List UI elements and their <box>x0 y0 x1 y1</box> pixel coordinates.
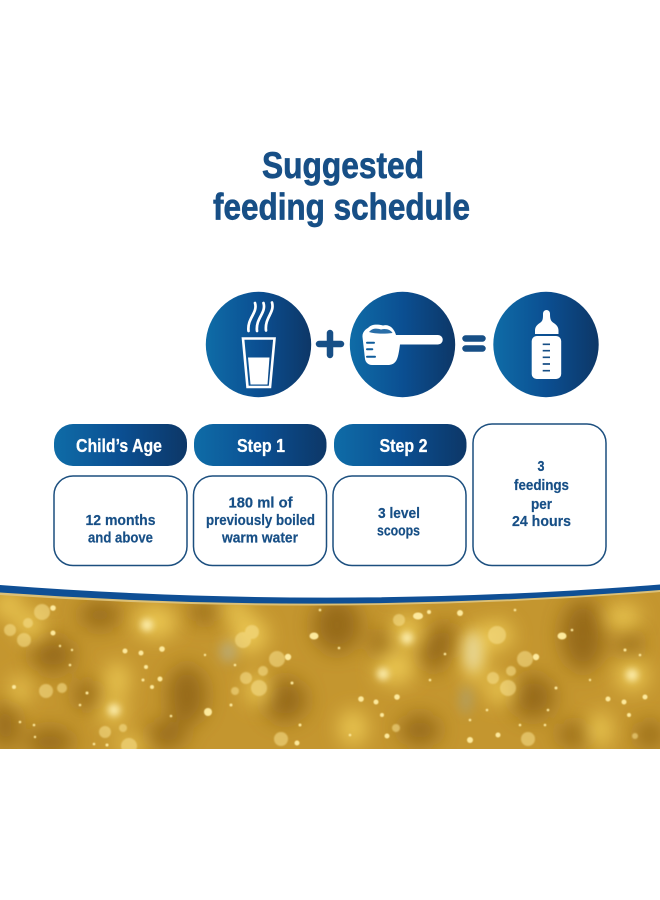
value box <box>54 476 187 566</box>
value box <box>194 476 326 566</box>
gold background <box>0 585 660 756</box>
value box: previously boiled <box>206 513 315 529</box>
value box: warm water <box>221 530 298 546</box>
column: feedings box: 24 hours <box>512 514 571 530</box>
icon: plus <box>319 333 341 355</box>
value box: and above <box>88 530 153 546</box>
column: step 2 <box>333 424 466 566</box>
header pill: Step 2 <box>380 436 428 456</box>
value box: 12 months <box>86 513 156 529</box>
gold edge <box>0 590 660 604</box>
header pill: Step 1 <box>237 436 285 456</box>
icon: measuring scoop <box>350 292 455 397</box>
column: child's age <box>54 424 187 566</box>
icon: equals <box>466 338 482 348</box>
equation icons <box>206 292 599 397</box>
blue curve <box>0 584 660 604</box>
icon: glass of warm water <box>206 292 311 397</box>
header pill <box>194 424 326 466</box>
title: feeding schedule <box>213 186 470 228</box>
column: feedings box: 3 <box>538 459 544 475</box>
value box: 3 level <box>378 506 420 522</box>
header pill <box>334 424 466 466</box>
header pill <box>54 424 187 466</box>
title: Suggested <box>262 145 424 186</box>
column: feedings box <box>473 424 606 566</box>
column: feedings box: per <box>531 497 552 513</box>
gold bokeh band with blue curve <box>0 584 660 756</box>
value box: scoops <box>377 524 420 540</box>
icon: baby bottle <box>493 292 599 397</box>
column: step 1 <box>194 424 326 566</box>
value box <box>333 476 466 566</box>
title <box>213 145 470 228</box>
column: feedings box: feedings <box>514 478 569 494</box>
header pill: Child’s Age <box>76 436 162 456</box>
value box: 180 ml of <box>228 496 293 512</box>
